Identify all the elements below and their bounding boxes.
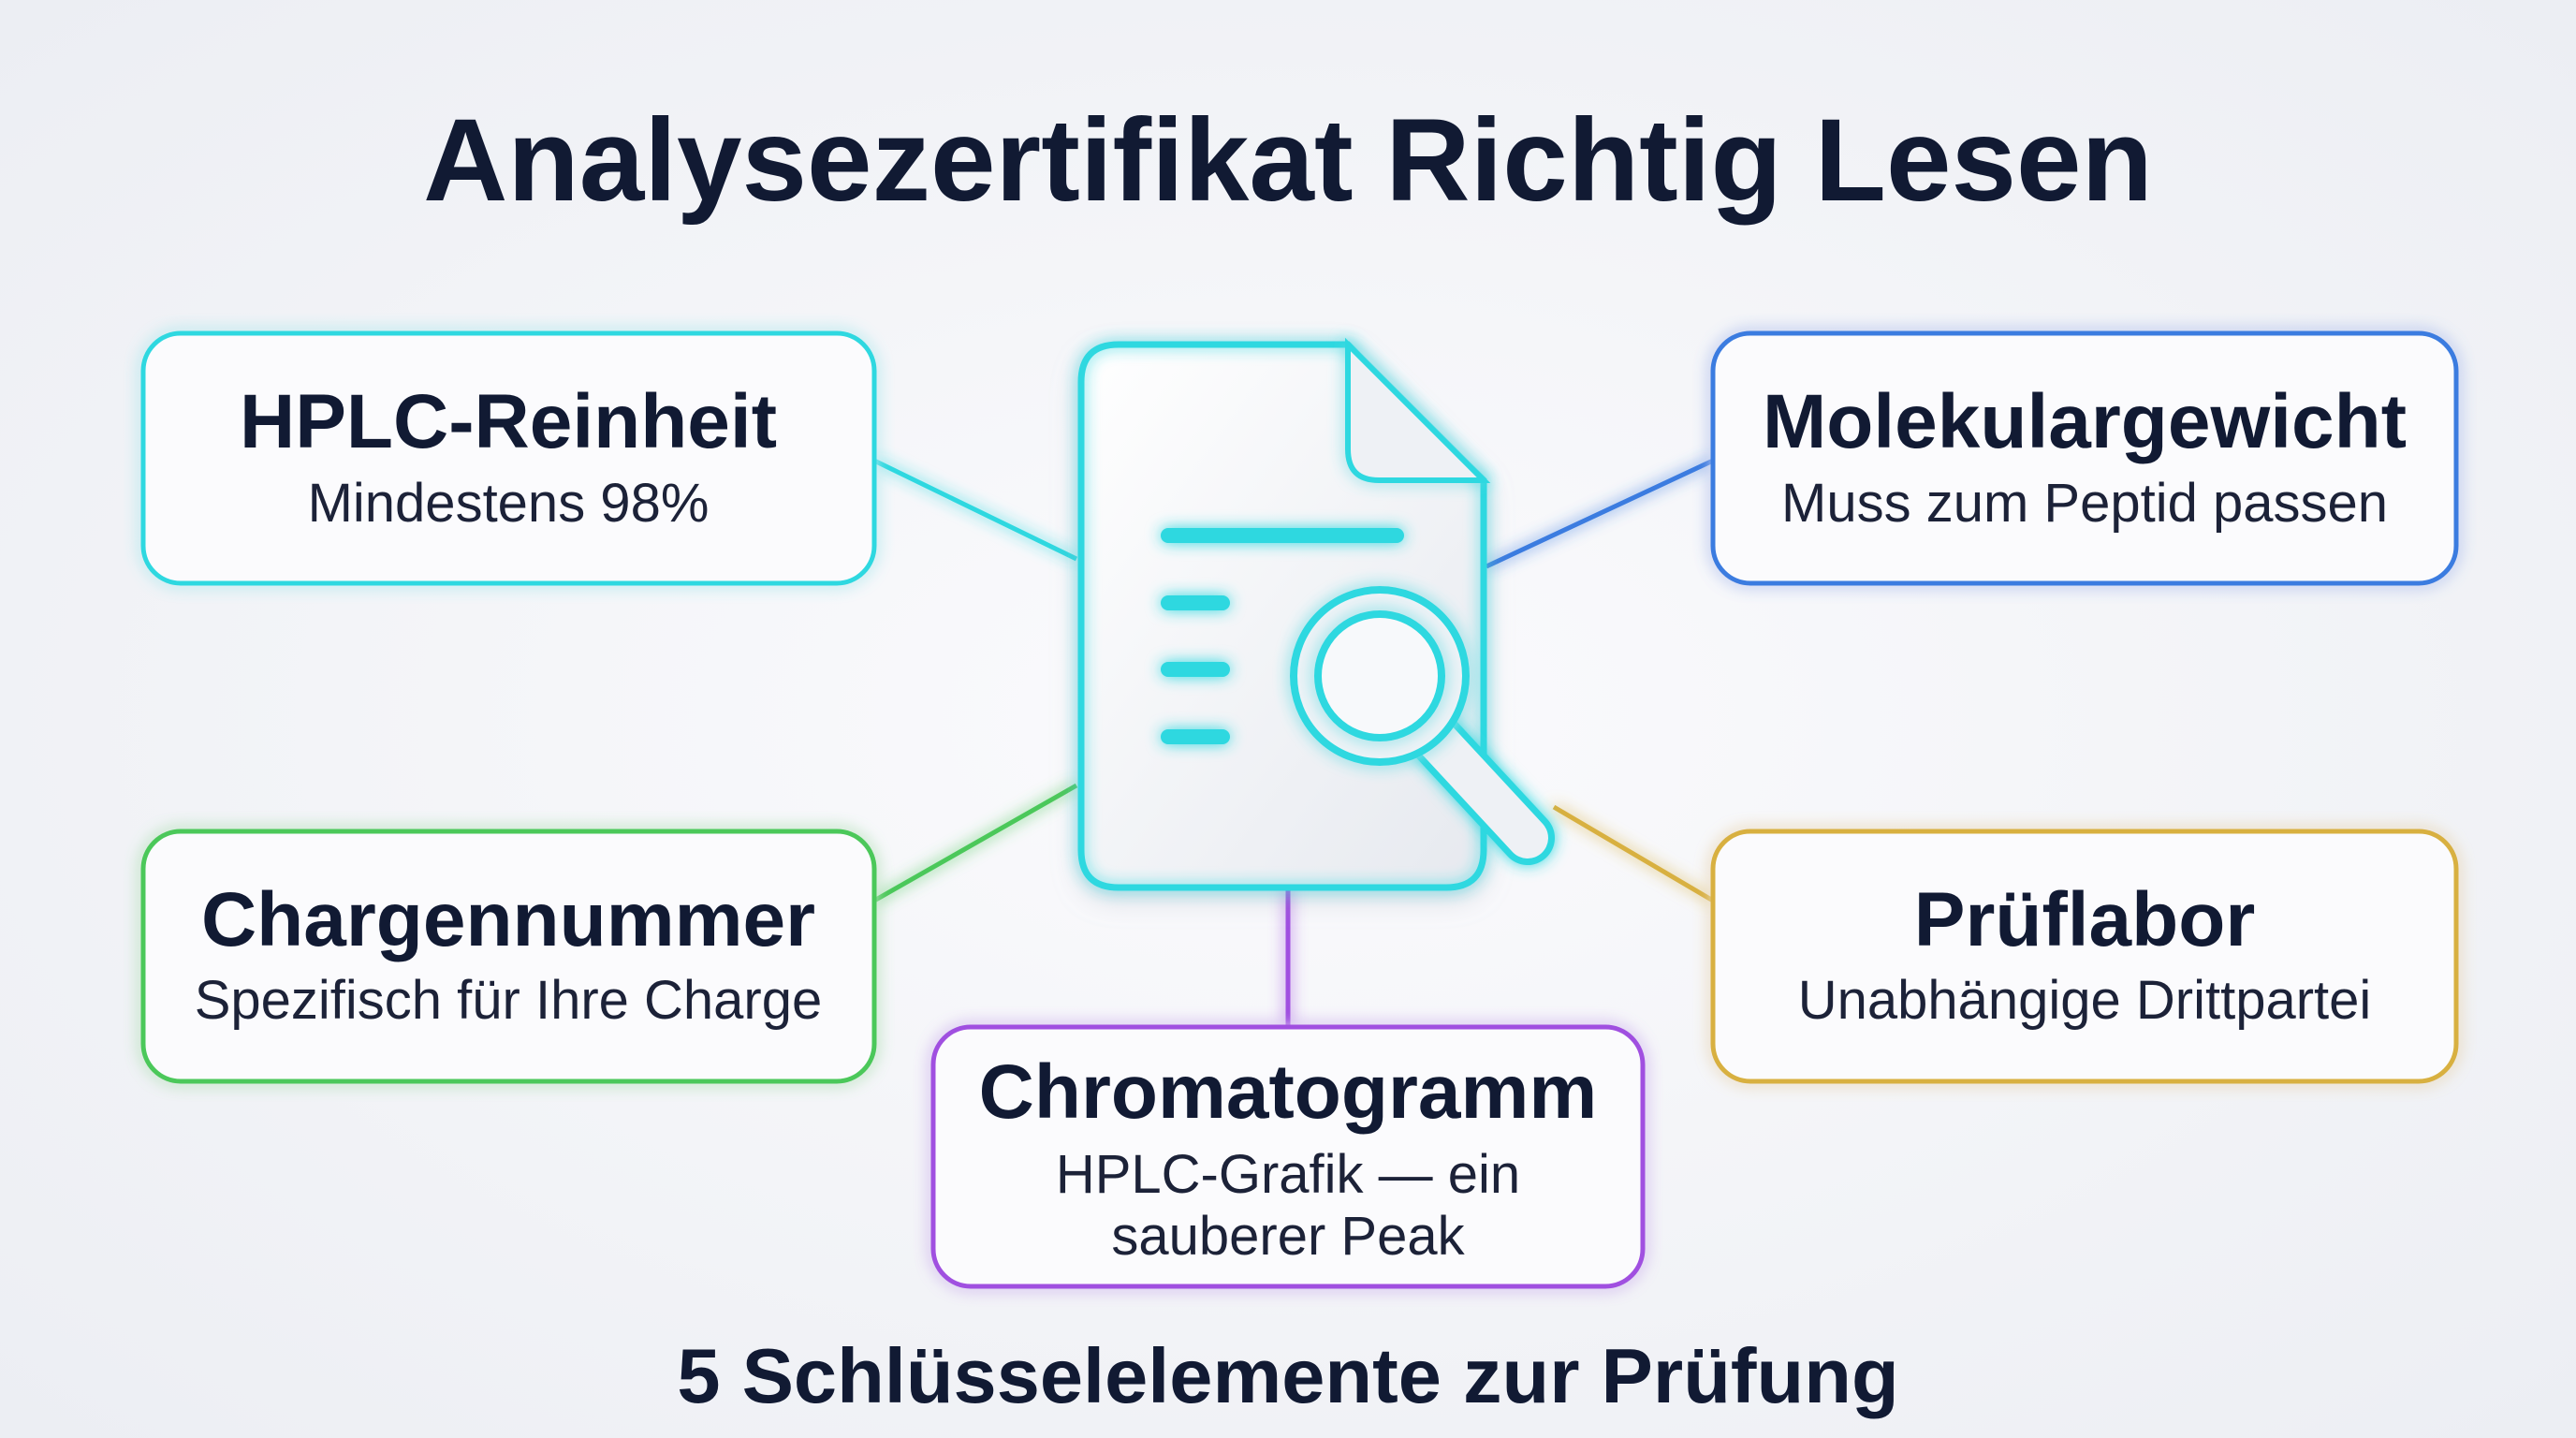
- panel: Chargennummer: [143, 831, 874, 1081]
- panel: HPLC-Reinheit: Mindestens 98%: [308, 473, 709, 534]
- panel: Molekulargewicht: Molekulargewicht: [1763, 379, 2407, 464]
- connector lines: [874, 461, 1713, 1027]
- panel: Chromatogramm: [933, 1027, 1643, 1286]
- panel: Chromatogramm: HPLC-Grafik — ein: [1056, 1144, 1520, 1205]
- panel: Molekulargewicht: Muss zum Peptid passen: [1781, 473, 2388, 534]
- panel: Chargennummer: Spezifisch für Ihre Charge: [195, 970, 822, 1031]
- panel: Prüflabor: [1713, 831, 2456, 1081]
- panel: HPLC-Reinheit: [143, 333, 874, 583]
- title: Analysezertifikat Richtig Lesen: [423, 95, 2153, 226]
- panel: Chromatogramm: Chromatogramm: [979, 1049, 1597, 1135]
- panel: Prüflabor: Prüflabor: [1914, 877, 2255, 962]
- panel: Molekulargewicht: [1713, 333, 2456, 583]
- footer caption: 5 Schlüsselelemente zur Prüfung: [677, 1332, 1899, 1419]
- panel: Chromatogramm: sauberer Peak: [1111, 1206, 1466, 1267]
- icon: document with magnifier: [1081, 345, 1528, 888]
- panel: HPLC-Reinheit: HPLC-Reinheit: [240, 379, 777, 464]
- panel: Chargennummer: Chargennummer: [201, 877, 815, 962]
- panel: Prüflabor: Unabhängige Drittpartei: [1798, 970, 2371, 1031]
